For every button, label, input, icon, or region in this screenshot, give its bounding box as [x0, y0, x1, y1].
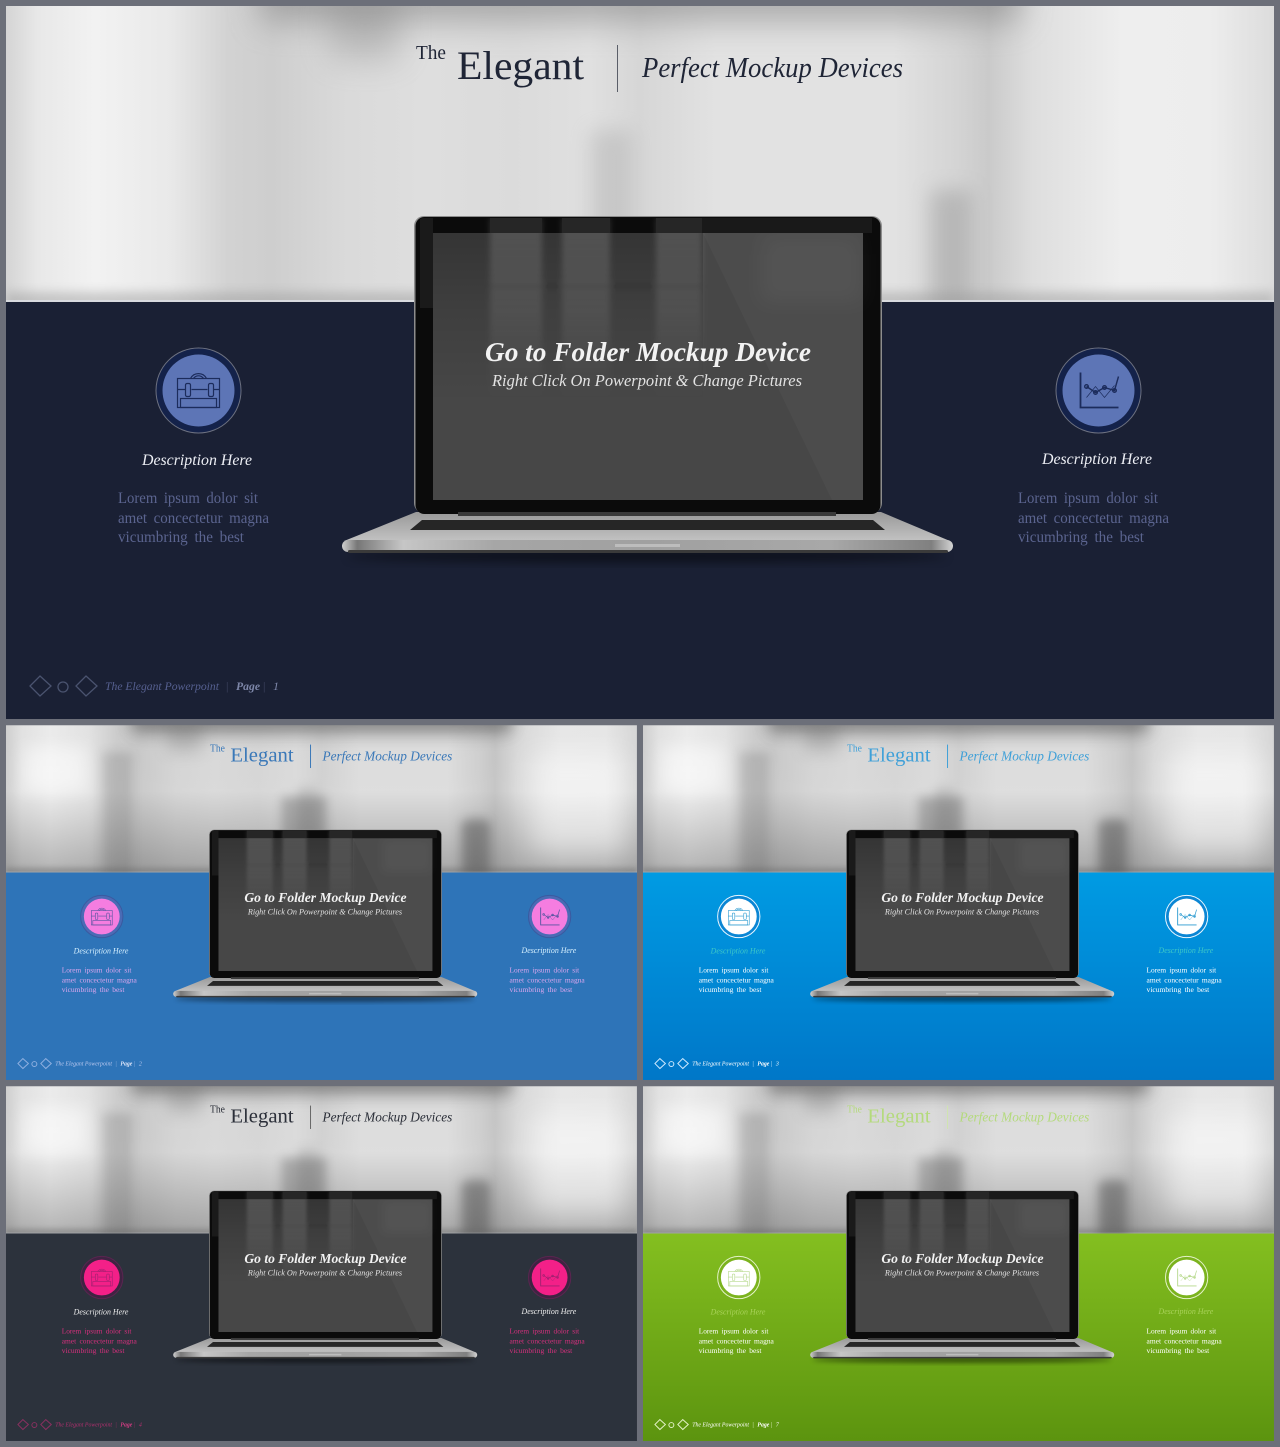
left description [62, 1308, 137, 1355]
left description: amet concectetur magna [699, 975, 774, 984]
left description: amet concectetur magna [118, 510, 269, 527]
left description: vicumbring the best [62, 1346, 125, 1355]
wall backdrop [643, 1063, 1274, 1252]
right description: vicumbring the best [510, 985, 573, 994]
title: Perfect Mockup Devices [322, 1111, 452, 1126]
left description: vicumbring the best [62, 985, 125, 994]
left description: Description Here [73, 947, 129, 956]
laptop mockup [810, 1191, 1114, 1363]
wall backdrop [643, 702, 1274, 891]
footer: 3 [775, 1062, 779, 1068]
right description: vicumbring the best [1147, 985, 1210, 994]
floor panel [6, 872, 637, 1080]
right description: Lorem ipsum dolor sit [1018, 490, 1159, 507]
slide 5: green [643, 1063, 1274, 1441]
right description: Description Here [1158, 946, 1214, 955]
floor panel [6, 302, 1274, 719]
icon: briefcase [156, 348, 241, 433]
footer: 1 [273, 679, 279, 693]
title: Elegant [230, 745, 294, 767]
footer: | [115, 1062, 117, 1068]
right description: vicumbring the best [1147, 1346, 1210, 1355]
right description: amet concectetur magna [510, 1336, 585, 1345]
title: Elegant [230, 1106, 294, 1128]
screen text [244, 890, 407, 916]
footer: | [771, 1423, 772, 1429]
footer: Page [757, 1423, 770, 1429]
title: Elegant [457, 43, 584, 88]
footer [655, 1420, 780, 1430]
right description: Lorem ipsum dolor sit [510, 1326, 580, 1335]
footer: Page [120, 1423, 133, 1429]
screen text: Go to Folder Mockup Device [881, 890, 1044, 905]
footer [18, 1059, 142, 1069]
screen text: Right Click On Powerpoint & Change Pictures [247, 906, 403, 916]
slide 3: sky blue [643, 702, 1274, 1080]
icon: line chart [528, 895, 571, 938]
left description: amet concectetur magna [62, 1336, 137, 1345]
left description: Lorem ipsum dolor sit [699, 965, 769, 974]
footer: | [263, 679, 265, 693]
right description [1018, 451, 1169, 546]
right description: vicumbring the best [1018, 529, 1145, 546]
footer: The Elegant Powerpoint [692, 1062, 749, 1068]
left description: vicumbring the best [699, 985, 762, 994]
screen text: Go to Folder Mockup Device [485, 337, 811, 367]
screen text: Go to Folder Mockup Device [244, 890, 407, 905]
title: Perfect Mockup Devices [959, 750, 1089, 765]
left description: amet concectetur magna [62, 975, 137, 984]
title: Perfect Mockup Devices [322, 750, 452, 765]
left description: Lorem ipsum dolor sit [62, 965, 132, 974]
right description: amet concectetur magna [1147, 975, 1222, 984]
footer: Page [120, 1062, 133, 1068]
right description: amet concectetur magna [1018, 510, 1169, 527]
footer: 7 [776, 1423, 780, 1429]
right description: amet concectetur magna [1147, 1336, 1222, 1345]
title: The [847, 1105, 863, 1116]
footer: | [134, 1062, 135, 1068]
left description [699, 1308, 774, 1355]
footer: The Elegant Powerpoint [55, 1423, 112, 1429]
footer: 2 [139, 1062, 142, 1068]
left description: Description Here [73, 1308, 129, 1317]
icon: line chart [528, 1256, 571, 1299]
laptop mockup [173, 1191, 477, 1363]
footer [655, 1059, 779, 1069]
footer [18, 1420, 142, 1430]
icon: briefcase [718, 1256, 760, 1299]
title: Elegant [867, 745, 931, 767]
screen text: Right Click On Powerpoint & Change Pictures [247, 1267, 403, 1277]
slide 1: navy [6, 0, 1274, 719]
right description: Lorem ipsum dolor sit [1147, 965, 1217, 974]
right description: Description Here [1158, 1307, 1214, 1316]
right description [1147, 946, 1222, 994]
icon: briefcase [81, 1256, 123, 1299]
footer [30, 676, 279, 696]
left description: Lorem ipsum dolor sit [62, 1326, 132, 1335]
footer: The Elegant Powerpoint [692, 1423, 749, 1429]
footer: Page [236, 679, 261, 693]
right description [1147, 1307, 1222, 1355]
title: Perfect Mockup Devices [959, 1111, 1089, 1126]
wall backdrop [6, 702, 637, 891]
wall backdrop [6, 1063, 637, 1252]
left description: Description Here [710, 1308, 766, 1317]
footer: The Elegant Powerpoint [105, 679, 220, 693]
left description: vicumbring the best [699, 1346, 762, 1355]
footer: | [771, 1062, 772, 1068]
title [847, 1105, 1089, 1129]
footer: | [752, 1423, 754, 1429]
screen text [881, 890, 1044, 916]
right description: Description Here [521, 1307, 577, 1316]
screen text: Right Click On Powerpoint & Change Pictures [491, 371, 802, 390]
right description: Lorem ipsum dolor sit [1147, 1326, 1217, 1335]
slide 2: blue [6, 702, 637, 1080]
wall backdrop [6, 0, 1274, 340]
screen text [485, 337, 811, 390]
title: Elegant [867, 1106, 931, 1128]
left description [118, 452, 269, 546]
title [847, 744, 1089, 768]
screen text: Go to Folder Mockup Device [881, 1251, 1044, 1266]
footer: | [752, 1062, 754, 1068]
left description: Description Here [141, 452, 252, 469]
right description: Description Here [1041, 451, 1152, 468]
left description: amet concectetur magna [699, 1336, 774, 1345]
right description [510, 1307, 585, 1355]
right description: amet concectetur magna [510, 975, 585, 984]
screen text [881, 1251, 1044, 1277]
floor panel [6, 1233, 637, 1441]
icon: briefcase [718, 895, 760, 938]
footer: | [226, 679, 228, 693]
icon: line chart [1056, 348, 1141, 433]
title [210, 744, 452, 768]
laptop mockup [810, 830, 1114, 1002]
title: The [210, 1105, 226, 1116]
left description [699, 947, 774, 994]
footer: | [115, 1423, 117, 1429]
footer: | [134, 1423, 135, 1429]
icon: line chart [1165, 1256, 1208, 1299]
icon: briefcase [81, 895, 123, 938]
left description: vicumbring the best [118, 529, 245, 546]
screen text: Right Click On Powerpoint & Change Pictures [884, 1267, 1040, 1277]
screen text: Go to Folder Mockup Device [244, 1251, 407, 1266]
left description: Description Here [710, 947, 766, 956]
title: The [210, 744, 226, 755]
floor panel [643, 1233, 1274, 1441]
left description: Lorem ipsum dolor sit [699, 1326, 769, 1335]
left description [62, 947, 137, 994]
right description [510, 946, 585, 994]
laptop mockup [173, 830, 477, 1002]
title: Perfect Mockup Devices [641, 53, 903, 84]
laptop mockup [342, 216, 953, 562]
title: The [847, 744, 863, 755]
right description: vicumbring the best [510, 1346, 573, 1355]
right description: Lorem ipsum dolor sit [510, 965, 580, 974]
footer: Page [757, 1062, 770, 1068]
footer: 4 [139, 1422, 142, 1429]
icon: line chart [1165, 895, 1208, 938]
left description: Lorem ipsum dolor sit [118, 490, 259, 507]
screen text: Right Click On Powerpoint & Change Pictures [884, 906, 1040, 916]
title [210, 1105, 452, 1129]
footer: The Elegant Powerpoint [55, 1062, 112, 1068]
right description: Description Here [521, 946, 577, 955]
screen text [244, 1251, 407, 1277]
slide 4: charcoal [6, 1063, 637, 1441]
title [416, 42, 903, 92]
title: The [416, 42, 446, 64]
floor panel [643, 872, 1274, 1080]
